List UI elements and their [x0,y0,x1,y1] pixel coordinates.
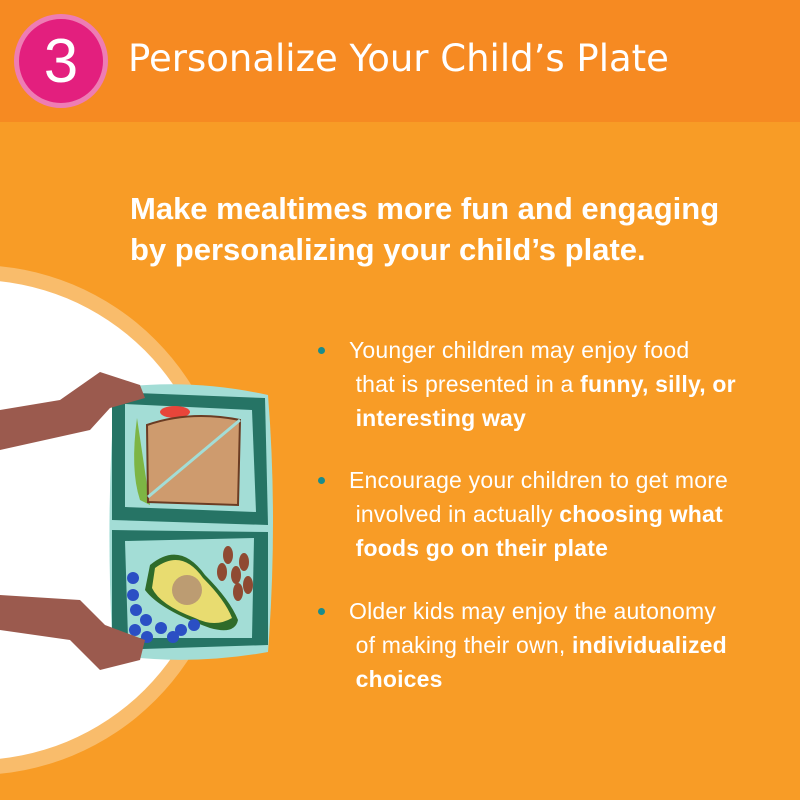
bullet 3 [318,598,727,692]
intro text: Make mealtimes more fun and engaging [130,191,719,226]
number badge: 3 [44,27,78,96]
bullet 2 [318,467,728,561]
bullet 1: that is presented in a funny, silly, or [356,371,736,397]
bullet 2: involved in actually choosing what [356,501,723,527]
bullet 3: of making their own, individualized [356,632,727,658]
intro text [130,191,719,267]
bullet 3: choices [356,666,443,692]
intro text: by personalizing your child’s plate. [130,232,646,267]
number badge [14,14,108,108]
bullet 1: interesting way [356,405,526,431]
bullet 1 [318,337,736,431]
title: Personalize Your Child’s Plate [128,37,669,80]
bullet 2: Encourage your children to get more [349,467,728,493]
bullet 2: foods go on their plate [356,535,608,561]
bullet 3: Older kids may enjoy the autonomy [349,598,716,624]
bullet 1: Younger children may enjoy food [349,337,689,363]
header bar [0,0,800,122]
